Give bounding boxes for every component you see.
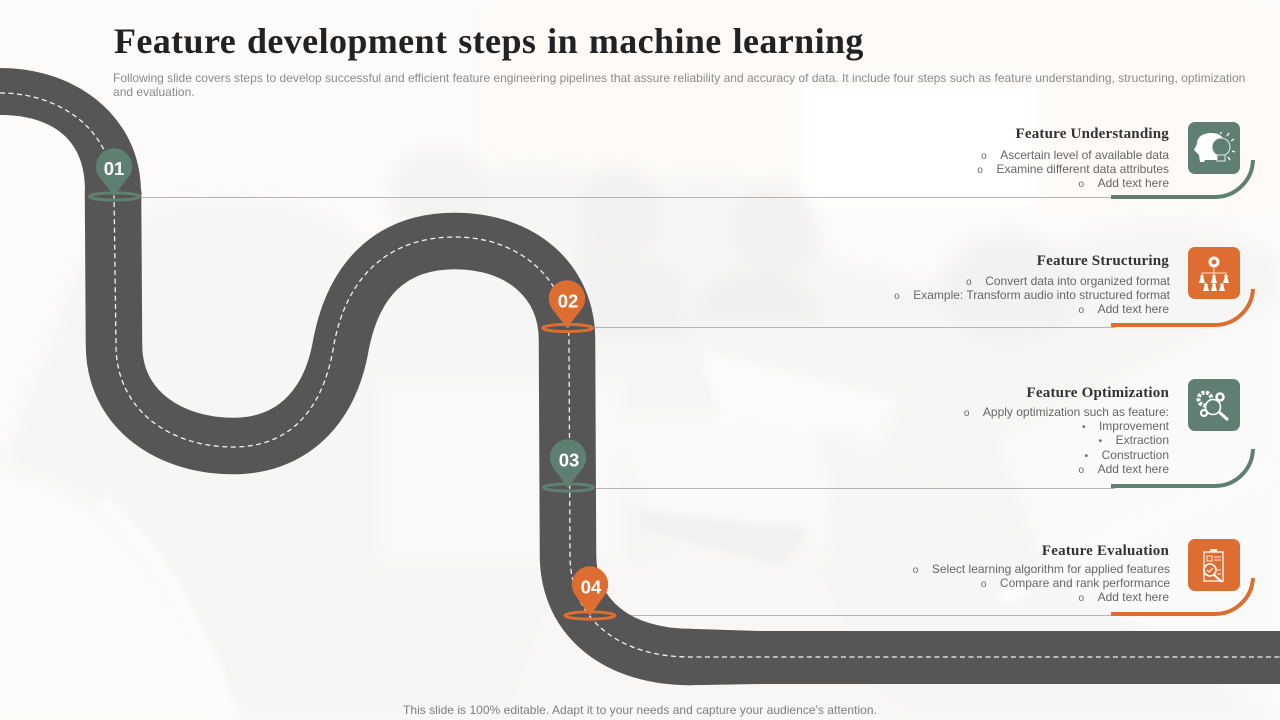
text block: Feature Optimization: o (1079, 465, 1084, 476)
marker 03: 03 (559, 450, 579, 470)
text block: Feature Structuring: Convert data into organized format (985, 274, 1170, 288)
text block: Feature Understanding: Add text here (1098, 176, 1169, 190)
text block: Feature Understanding: o (977, 165, 983, 176)
icon: gears with magnifier (1188, 379, 1240, 431)
accent curve 3 (1111, 449, 1253, 486)
text block: Feature Optimization: o (964, 408, 969, 419)
text block: Feature Evaluation: Feature Evaluation (1042, 543, 1169, 559)
marker 01: 01 (104, 158, 124, 179)
footer note: This slide is 100% editable. Adapt it to your needs and capture your audience's attention. (403, 703, 877, 717)
marker 02 (542, 280, 592, 332)
text block: Feature Evaluation: Select learning algorithm for applied features (932, 562, 1170, 576)
text block: Feature Optimization: • (1082, 422, 1085, 433)
text block: Feature Optimization: Extraction (1116, 433, 1169, 447)
text block: Feature Optimization (964, 385, 1169, 476)
text block: Feature Structuring: Feature Structuring (1037, 253, 1169, 269)
text block: Feature Structuring: o (1079, 305, 1084, 316)
text block: Feature Understanding: Examine different data attributes (996, 162, 1169, 176)
text block: Feature Evaluation: Add text here (1098, 590, 1169, 604)
accent curve 4 (1111, 578, 1253, 614)
text block: Feature Structuring: Add text here (1098, 302, 1169, 316)
accent curve 1 (1111, 160, 1253, 197)
text block: Feature Understanding (977, 126, 1170, 190)
connector lines (141, 198, 1115, 616)
text block: Feature Evaluation: o (981, 579, 986, 590)
icon: head with light bulb (1188, 122, 1240, 174)
marker 04 (565, 566, 615, 619)
text block: Feature Optimization: Apply optimization such as feature: (983, 405, 1169, 419)
text block: Feature Evaluation: Compare and rank performance (1000, 576, 1170, 590)
icon: clipboard with magnifier (1188, 539, 1240, 591)
marker 01 (90, 148, 140, 200)
text block: Feature Evaluation: o (1079, 593, 1084, 604)
text block: Feature Understanding: Ascertain level of available data (1000, 148, 1169, 162)
icon: hierarchy (1188, 247, 1240, 299)
text block: Feature Optimization: Feature Optimization (1027, 385, 1169, 401)
title: Feature development steps in machine learning (114, 21, 864, 61)
text block: Feature Optimization: Add text here (1098, 462, 1169, 476)
marker 02: 02 (558, 290, 578, 312)
text block: Feature Optimization: Improvement (1099, 419, 1169, 433)
accent curve 2 (1111, 289, 1253, 325)
text block: Feature Structuring: o (894, 291, 900, 302)
text block: Feature Optimization: • (1099, 436, 1102, 447)
text block: Feature Structuring: Example: Transform audio into structured format (913, 288, 1170, 302)
subtitle: Following slide covers steps to develop successful and efficient feature engineering pipelines that assure reliability and accuracy of data. It include four steps such as feature understanding, structuring, optimization and evaluation. (113, 71, 1245, 99)
marker 03 (544, 439, 594, 491)
road centre dashes (0, 93, 1280, 657)
text block: Feature Structuring (894, 253, 1170, 316)
text block: Feature Optimization: Construction (1102, 448, 1169, 462)
text block: Feature Understanding: o (1079, 179, 1084, 190)
text block: Feature Evaluation (913, 543, 1170, 604)
marker 04: 04 (581, 576, 602, 598)
text block: Feature Optimization: • (1085, 451, 1088, 462)
text block: Feature Evaluation: o (913, 565, 918, 576)
text block: Feature Structuring: o (966, 277, 972, 288)
text block: Feature Understanding: o (981, 151, 987, 162)
text block: Feature Understanding: Feature Understanding (1015, 126, 1169, 142)
